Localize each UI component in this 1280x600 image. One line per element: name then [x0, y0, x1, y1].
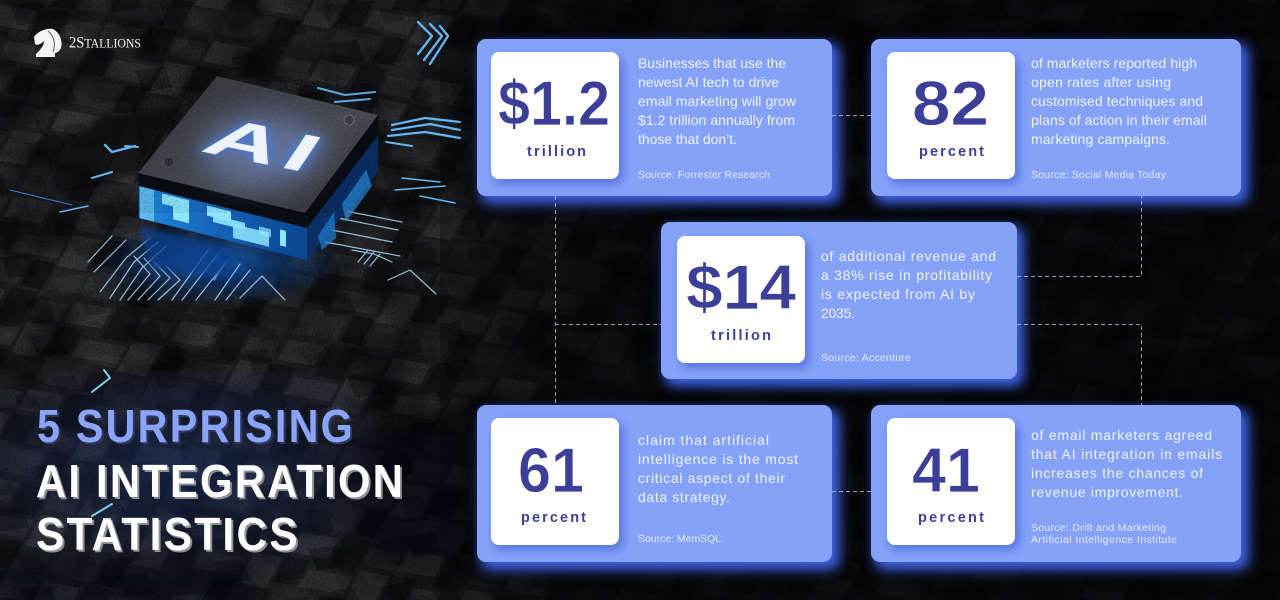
panel: card 1 [470, 32, 844, 208]
stat box: trillion [527, 144, 586, 160]
description: claim that artificial [638, 432, 769, 448]
stat box: percent [918, 510, 984, 526]
description: data strategy. [638, 489, 730, 505]
description: marketing campaigns. [1031, 131, 1170, 147]
AI chip [138, 76, 379, 278]
stat box [491, 418, 619, 545]
dashed connectors [555, 116, 1142, 492]
stat box [677, 236, 805, 363]
stat box: $14 [686, 253, 796, 323]
title: 5 SURPRISING [37, 400, 355, 452]
stat box: percent [521, 510, 586, 526]
chip left glowing face [139, 185, 307, 260]
logo: 2Stallions: 2STALLIONS [69, 34, 141, 52]
AI lettering: AI [192, 107, 340, 184]
source: Source: Forrester Research [638, 169, 770, 181]
panel: card 2 [864, 32, 1254, 208]
description: those that don’t. [638, 131, 737, 147]
panel: card 4 [470, 398, 844, 574]
circuit traces [10, 22, 460, 516]
description: plans of action in their email [1031, 112, 1207, 128]
description: intelligence is the most [638, 451, 798, 467]
stat box: $1.2 [498, 69, 610, 139]
source: Artificial Intelligence Institute [1031, 534, 1177, 546]
description: revenue improvement. [1031, 484, 1183, 500]
description: Businesses that use the [638, 55, 786, 71]
stat box: percent [919, 144, 984, 160]
stat box: 61 [518, 436, 584, 506]
description [1031, 427, 1222, 500]
description: open rates after using [1031, 74, 1171, 90]
panel: card 3 [654, 215, 1030, 391]
stat box: 41 [912, 436, 980, 506]
source: Source: Social Media Today [1031, 169, 1167, 181]
icon: stallion head [34, 29, 62, 57]
chip top face [138, 76, 378, 213]
source [1031, 522, 1177, 546]
title: 5 SURPRISING [39, 402, 357, 454]
source: Source: MemSQL [638, 533, 721, 545]
title: STATISTICS [36, 508, 300, 560]
description: that AI integration in emails [1031, 446, 1222, 462]
description: $1.2 trillion annually from [638, 112, 795, 128]
description: 2035. [821, 305, 855, 321]
title: AI INTEGRATION [38, 457, 407, 509]
logo: 2Stallions [34, 29, 141, 57]
description: increases the chances of [1031, 465, 1203, 481]
stat box [491, 52, 619, 179]
chip right face [307, 132, 378, 260]
chip base strip [138, 115, 379, 228]
description [638, 432, 798, 505]
stat box [887, 52, 1015, 179]
description: is expected from AI by [821, 286, 975, 302]
source: Source: Drift and Marketing [1031, 522, 1166, 534]
title [36, 400, 407, 562]
stat box [887, 418, 1015, 545]
description [1031, 55, 1207, 147]
description: email marketing will grow [638, 93, 797, 109]
stat box: trillion [711, 328, 771, 344]
description: critical aspect of their [638, 470, 785, 486]
description: of email marketers agreed [1031, 427, 1212, 443]
description: of marketers reported high [1031, 55, 1197, 71]
source: Source: Accenture [821, 352, 911, 364]
description: of additional revenue and [821, 248, 996, 264]
title: STATISTICS [38, 510, 302, 562]
description: customised techniques and [1031, 93, 1203, 109]
description: newest AI tech to drive [638, 74, 779, 90]
description [821, 248, 996, 321]
stat box: 82 [912, 69, 989, 139]
AI lettering: AI [192, 107, 340, 184]
description: a 38% rise in profitability [821, 267, 992, 283]
description [638, 55, 797, 147]
panel: card 5 [864, 398, 1254, 574]
title: AI INTEGRATION [36, 455, 405, 507]
